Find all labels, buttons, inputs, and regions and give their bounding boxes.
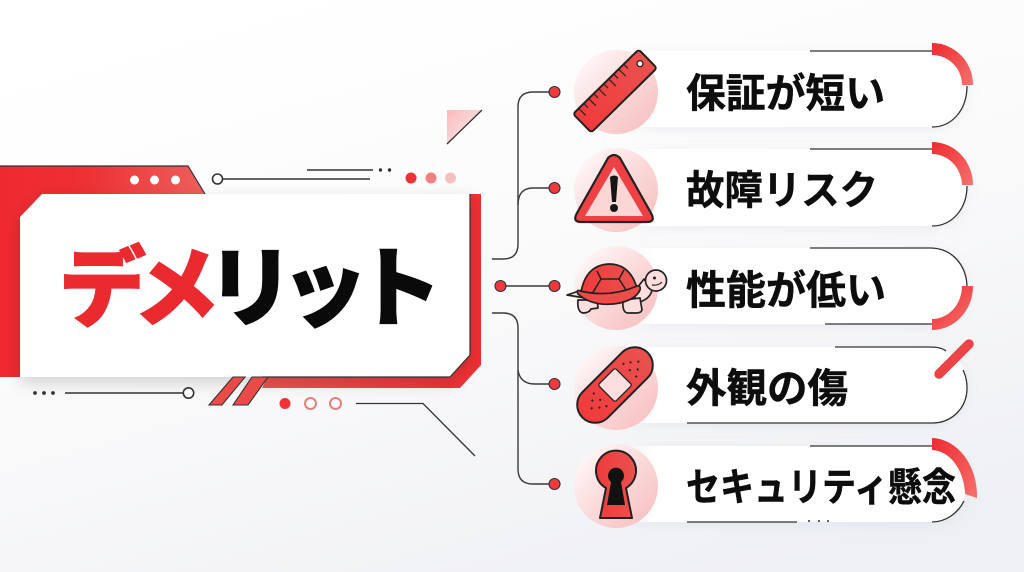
panel: white title box (20, 194, 470, 377)
lower angled line (356, 404, 475, 456)
row background (620, 248, 967, 324)
label: 性能が低い (686, 269, 886, 313)
row background (620, 149, 967, 226)
lower left line with ring (34, 388, 194, 398)
frame lines (810, 51, 967, 127)
header dots (130, 176, 180, 184)
frame lines (810, 248, 967, 324)
icon disc (574, 148, 658, 232)
label: 保証が短い (686, 72, 885, 116)
panel: right and bottom red frame (262, 194, 481, 388)
label: 故障リスク (686, 169, 878, 213)
icon: turtle (567, 264, 666, 313)
decorative triangle (447, 110, 482, 144)
title text: デメリット (59, 241, 442, 338)
icon: bandage (570, 340, 660, 430)
row 1: warranty (573, 43, 973, 134)
connector tree (492, 86, 560, 490)
row 5: security (574, 438, 977, 528)
red arc (932, 142, 973, 185)
frame lines (687, 347, 967, 423)
red slash (939, 344, 969, 374)
icon: keyhole (596, 451, 636, 518)
row 2: failure risk (574, 142, 973, 232)
red arc (932, 438, 977, 498)
row 4: appearance damage (570, 340, 969, 430)
row background (620, 446, 967, 522)
label: 外観の傷 (686, 367, 848, 411)
panel: red header frame (0, 166, 205, 377)
icon disc (574, 50, 658, 134)
frame lines (687, 446, 964, 522)
icon: ruler (573, 49, 657, 133)
row background (620, 347, 967, 423)
row background (620, 51, 967, 127)
slanted stripes (209, 377, 268, 405)
top red dots (406, 172, 456, 184)
label: セキュリティ懸念 (686, 467, 956, 510)
icon: warning triangle (575, 155, 653, 222)
icon disc (574, 346, 658, 430)
frame lines (810, 149, 967, 226)
icon disc (574, 444, 658, 528)
lower dots (280, 398, 341, 409)
icon disc (574, 246, 658, 330)
red arc (932, 286, 973, 330)
row 3: low performance (567, 246, 973, 330)
title panel (0, 166, 481, 388)
red arc (932, 43, 973, 85)
top connector line with ring (212, 169, 390, 184)
